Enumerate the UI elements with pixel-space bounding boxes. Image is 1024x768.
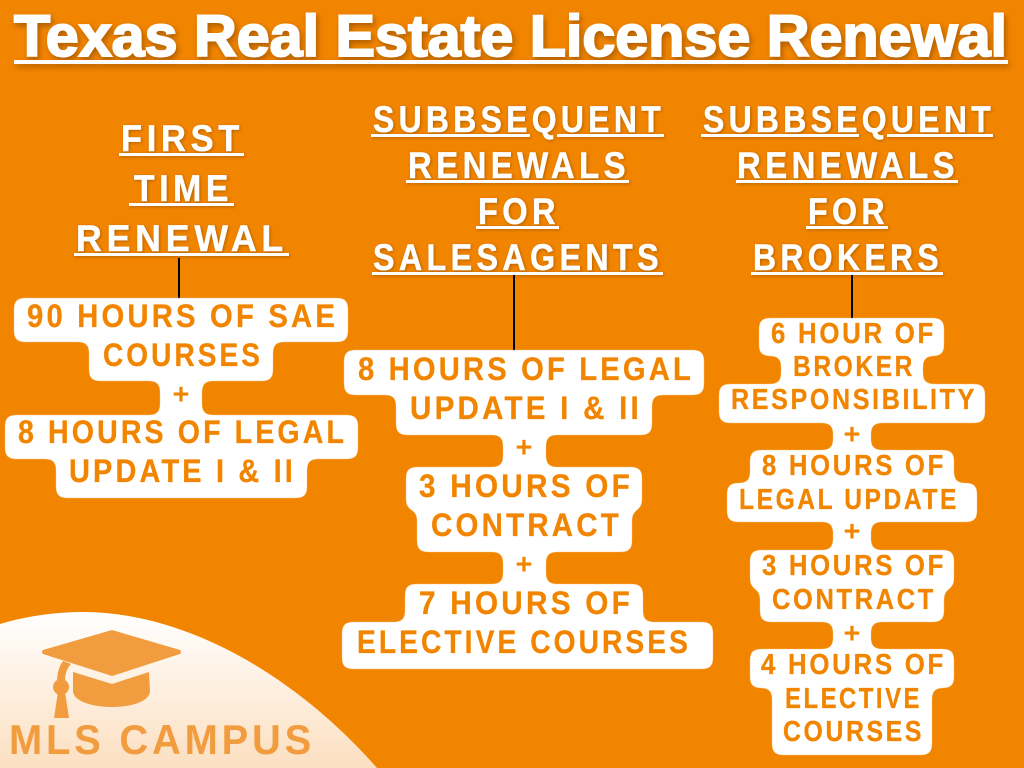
- logo text: MLS CAMPUS: [9, 716, 315, 763]
- text: 3 hours of contract: CONTRACT: [431, 507, 622, 543]
- text: 8 hours of legal update: 8 HOURS OF LEGAL: [358, 351, 694, 387]
- connector line: [178, 258, 180, 300]
- text: 8 hours of legal update: 8 HOURS OF: [762, 450, 946, 482]
- heading: subbsequent renewals for brokers: FOR: [808, 191, 889, 232]
- text: 4 hours of elective courses: [761, 649, 946, 748]
- text: 90 hours of SAE courses: 90 HOURS OF SAE: [27, 298, 338, 334]
- panel: subsequent renewals for sales agents: [342, 99, 713, 669]
- plus sign: +: [844, 419, 860, 451]
- text: 8 hours of legal update: LEGAL UPDATE: [739, 484, 959, 516]
- heading: subbsequent renewals for brokers: BROKERS: [753, 237, 943, 278]
- heading: subbsequent renewals for salesagents: RENEWALS: [408, 145, 630, 186]
- text: 4 hours of elective courses: ELECTIVE: [785, 683, 922, 715]
- text: 8 hours of legal update: [739, 450, 959, 516]
- logo: MLS Campus corner: [0, 612, 377, 768]
- text: 7 hours of elective courses: [357, 585, 691, 660]
- text: 8 hours of legal update: [18, 414, 347, 489]
- text: 8 hours of legal update: 8 HOURS OF LEGAL: [18, 414, 347, 450]
- connector line: [513, 275, 515, 352]
- heading: first time renewal: TIME: [134, 168, 233, 209]
- text: 3 hours of contract: CONTRACT: [772, 584, 936, 616]
- white requirement shape: [342, 350, 713, 669]
- text: 90 hours of SAE courses: COURSES: [103, 337, 263, 373]
- text: 6 hour of broker responsibility: 6 HOUR OF: [771, 318, 936, 350]
- heading: subbsequent renewals for brokers: [701, 99, 995, 278]
- panel: first time renewal: [5, 118, 358, 498]
- text: 6 hour of broker responsibility: RESPONSIBILITY: [731, 384, 977, 416]
- text: 4 hours of elective courses: 4 HOURS OF: [761, 649, 946, 681]
- text: 3 hours of contract: [419, 468, 633, 543]
- text: 6 hour of broker responsibility: [731, 318, 977, 416]
- heading: first time renewal: [74, 118, 289, 259]
- icon: graduation cap: [42, 630, 181, 718]
- panel: subsequent renewals for brokers: [701, 99, 995, 755]
- corner background shape: [0, 612, 377, 768]
- text: 8 hours of legal update: [358, 351, 694, 426]
- text: 6 hour of broker responsibility: BROKER: [793, 351, 915, 383]
- plus sign: +: [516, 432, 532, 464]
- heading: subbsequent renewals for salesagents: SALESAGENTS: [373, 237, 663, 278]
- text: 7 hours of elective courses: ELECTIVE COURSES: [357, 624, 691, 660]
- plus sign: +: [173, 379, 189, 411]
- white requirement shape: [5, 298, 358, 498]
- heading: subbsequent renewals for brokers: RENEWALS: [737, 145, 959, 186]
- plus sign: +: [844, 618, 860, 650]
- heading: subbsequent renewals for salesagents: FOR: [478, 191, 560, 232]
- plus sign: +: [844, 516, 860, 548]
- text: 7 hours of elective courses: 7 HOURS OF: [419, 585, 633, 621]
- white requirement shape: [719, 318, 985, 755]
- title: Texas Real Estate License Renewal: [14, 4, 1007, 69]
- text: 3 hours of contract: 3 HOURS OF: [762, 550, 946, 582]
- text: 90 hours of SAE courses: [27, 298, 338, 373]
- heading: first time renewal: RENEWAL: [76, 218, 288, 259]
- text: 3 hours of contract: [762, 550, 946, 616]
- connector line: [851, 275, 853, 320]
- text: 3 hours of contract: 3 HOURS OF: [419, 468, 633, 504]
- text: 8 hours of legal update: UPDATE I & II: [410, 390, 642, 426]
- text: 8 hours of legal update: UPDATE I & II: [69, 453, 296, 489]
- heading: subbsequent renewals for salesagents: SUBBSEQUENT: [373, 99, 665, 140]
- text: 4 hours of elective courses: COURSES: [783, 716, 924, 748]
- heading: first time renewal: FIRST: [121, 118, 244, 159]
- plus sign: +: [516, 549, 532, 581]
- heading: subbsequent renewals for salesagents: [371, 99, 665, 278]
